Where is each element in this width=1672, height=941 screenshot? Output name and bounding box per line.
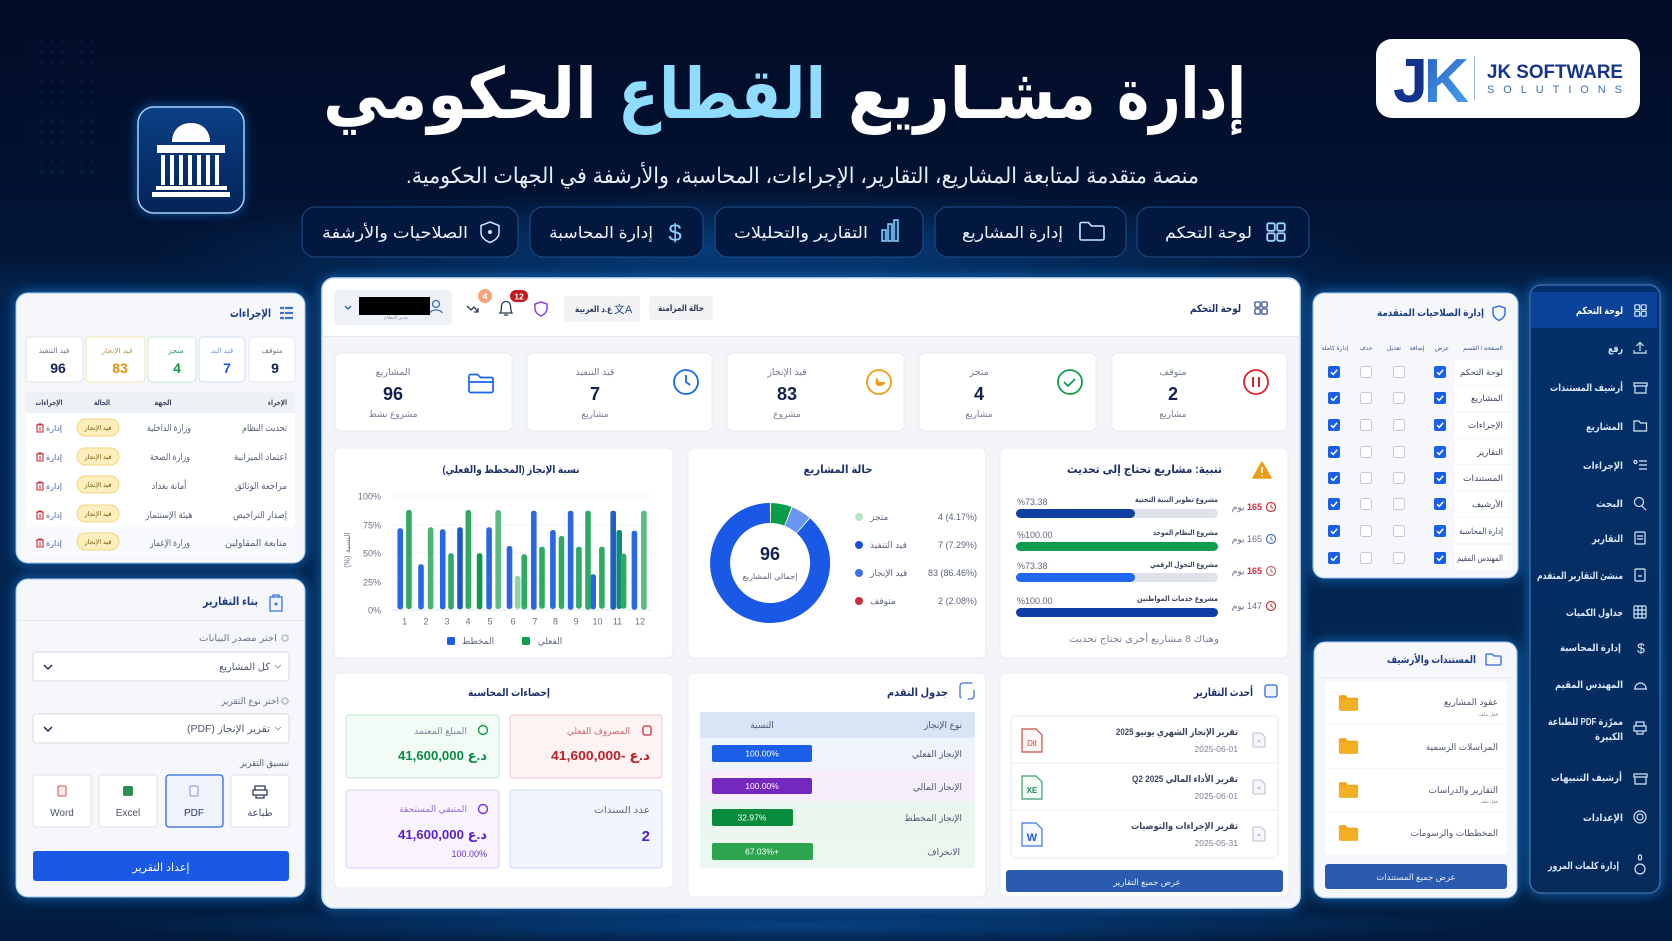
alert row 3: 165 يوم bbox=[1232, 566, 1262, 576]
panel: accounting statistics bbox=[334, 673, 673, 888]
progress table rows: 100.00% bbox=[745, 748, 779, 758]
alert row 3 bbox=[1016, 560, 1276, 582]
stat card: projects: المشاريع bbox=[376, 367, 410, 378]
pill: dashboard: لوحة التحكم bbox=[1165, 225, 1252, 243]
alert row 1 bbox=[1016, 495, 1276, 518]
donut chart bbox=[720, 513, 820, 613]
stat card: completed: منجز bbox=[968, 367, 989, 378]
progress heading bbox=[887, 683, 974, 699]
actions table: الحالة bbox=[94, 398, 110, 407]
panel: actions bbox=[16, 293, 305, 563]
card: vouchers count: 2 bbox=[642, 828, 650, 845]
chart axis labels: النسبة (%) bbox=[343, 532, 352, 568]
report row 1: Dlt bbox=[1027, 739, 1038, 748]
donut legend: متجز bbox=[869, 512, 888, 522]
chart axis labels: 7 bbox=[532, 616, 538, 626]
chart axis labels: 5 bbox=[487, 616, 493, 626]
main title: الحكومي bbox=[323, 55, 597, 135]
actions stat cards: 83 bbox=[112, 360, 128, 376]
main title bbox=[323, 55, 1246, 136]
permissions table: إضافة bbox=[1410, 345, 1425, 352]
pill: permissions bbox=[302, 207, 518, 257]
alert row 1: 165 يوم bbox=[1232, 502, 1262, 512]
report row 2: 2025-06-01 bbox=[1195, 791, 1238, 801]
view all reports button: عرض جميع التقارير bbox=[1112, 877, 1181, 887]
bell and badge: 12 bbox=[514, 292, 524, 302]
stat card: in execution: مشاريع bbox=[581, 409, 609, 419]
card: approved amount: المبلغ المعتمد bbox=[414, 726, 467, 736]
actions heading: الإجراءات bbox=[230, 308, 271, 320]
sidebar navigation: أرشيف التنبيهات bbox=[1551, 771, 1622, 784]
alert row 4: 147 يوم bbox=[1232, 601, 1262, 611]
documents list: المراسلات الرسمية bbox=[1426, 742, 1498, 752]
alert row 2: مشروع النظام الموحد bbox=[1153, 528, 1218, 537]
panel: main dashboard bbox=[322, 278, 1300, 908]
donut legend: 4 (4.17%) bbox=[938, 512, 977, 522]
view all documents button bbox=[1325, 864, 1507, 889]
actions stat cards: قيد التنفيذ bbox=[39, 346, 70, 355]
report type select: تقرير الإنجاز (PDF) bbox=[187, 724, 270, 735]
progress table rows: النسبة bbox=[750, 720, 774, 730]
header: institution icon bbox=[137, 106, 244, 213]
permissions table: الإجراءات bbox=[1468, 420, 1503, 431]
documents list: المخططات والرسومات bbox=[1410, 828, 1498, 838]
alert heading bbox=[1067, 462, 1271, 478]
actions table: متابعة المقاولين bbox=[225, 538, 287, 549]
donut legend: 7 (7.29%) bbox=[938, 540, 977, 550]
permissions table: الصفحة / القسم bbox=[1463, 345, 1503, 352]
progress table rows: الإنجاز المالي bbox=[913, 782, 962, 793]
documents heading: المستندات والأرشيف bbox=[1387, 653, 1476, 666]
alert row 4: مشروع خدمات المواطنين bbox=[1137, 594, 1218, 603]
chart axis labels bbox=[343, 492, 645, 626]
format buttons bbox=[33, 775, 289, 827]
main title: إدارة bbox=[1117, 55, 1246, 136]
documents list bbox=[1325, 682, 1507, 854]
actions table: الإجراءات bbox=[36, 398, 62, 407]
chart axis labels: 4 bbox=[465, 616, 471, 626]
report row 3: تقرير الإجراءات والتوصيات bbox=[1131, 821, 1238, 832]
stat card: completed: 4 bbox=[974, 384, 984, 404]
language box: ع.د العربية bbox=[575, 304, 613, 315]
format heading: تنسيق التقرير bbox=[239, 758, 289, 768]
chart axis labels: 10 bbox=[592, 616, 603, 626]
actions table: إدارة bbox=[46, 539, 62, 549]
chart axis labels: 11 bbox=[613, 616, 622, 626]
generate report button: إعداد التقرير bbox=[132, 862, 189, 874]
card: actual spending: المصروف الفعلي bbox=[567, 726, 630, 736]
alert row 4: %100.00 bbox=[1017, 596, 1053, 606]
actions table: قيد الإنجاز bbox=[84, 482, 111, 489]
alert row 1: %73.38 bbox=[1017, 497, 1048, 507]
pill: projects: إدارة المشاريع bbox=[962, 225, 1063, 243]
panel: progress table bbox=[688, 673, 986, 897]
actions table: أمانة بغداد bbox=[152, 479, 187, 492]
sidebar navigation: ممرّزة PDF للطباعة bbox=[1548, 717, 1623, 728]
report row 2: XE bbox=[1027, 786, 1038, 795]
chart axis labels: 2 bbox=[423, 616, 429, 626]
actions stat cards: 96 bbox=[50, 360, 66, 376]
pill: reports bbox=[715, 207, 923, 257]
donut legend: قيد التنفيذ bbox=[870, 540, 907, 550]
stat card: projects bbox=[335, 353, 512, 431]
chart axis labels: 50% bbox=[363, 548, 381, 558]
actions table bbox=[26, 392, 295, 556]
stat card: projects: مشروع نشط bbox=[368, 409, 418, 419]
progress table rows: الانحراف bbox=[927, 847, 960, 857]
panel: project status donut: 96 bbox=[760, 544, 780, 564]
reports heading: أحدث التقارير bbox=[1193, 685, 1253, 699]
panel: update alert bbox=[1000, 448, 1288, 658]
logo card: SOLUTIONS bbox=[1487, 84, 1622, 96]
permissions table: التقارير bbox=[1476, 447, 1503, 457]
permissions table: المشاريع bbox=[1471, 393, 1503, 403]
main title: مشـاريع bbox=[848, 55, 1096, 135]
actions table: هيئة الإستثمار bbox=[145, 510, 192, 521]
card: remaining due: د.ع 41,600,000 bbox=[398, 827, 487, 842]
sidebar navigation: إدارة كلمات المرور bbox=[1547, 861, 1619, 872]
actions stat cards: 9 bbox=[271, 360, 279, 376]
sidebar navigation: الإجراءات bbox=[1583, 461, 1623, 472]
sidebar navigation: رفع bbox=[1608, 344, 1623, 355]
page heading: لوحة التحكم bbox=[1190, 303, 1241, 315]
permissions table bbox=[1322, 345, 1512, 570]
card: actual spending: د.ع -41,600,000 bbox=[551, 748, 650, 763]
sidebar navigation bbox=[1530, 285, 1660, 893]
actions table: الإجراء bbox=[268, 398, 287, 407]
chart axis labels: 0% bbox=[368, 606, 381, 616]
permissions table: لوحة التحكم bbox=[1460, 367, 1503, 378]
actions stat cards: قيد الند bbox=[211, 346, 234, 355]
sidebar navigation: البحث bbox=[1596, 499, 1623, 510]
top bar bbox=[323, 279, 1299, 337]
card: remaining due bbox=[346, 790, 499, 868]
view all reports button bbox=[1006, 870, 1283, 892]
report row 1: تقرير الإنجاز الشهري يونيو 2025 bbox=[1116, 727, 1238, 738]
stat card: in progress: 83 bbox=[777, 384, 797, 404]
actions table: إدارة bbox=[46, 424, 62, 434]
donut legend: قيد الإنجاز bbox=[869, 568, 907, 579]
progress table rows: نوع الإنجاز bbox=[923, 720, 962, 731]
panel: advanced permissions bbox=[1313, 293, 1518, 578]
permissions table: الأرشيف bbox=[1472, 499, 1503, 509]
report type select: اختر نوع التقرير bbox=[220, 696, 279, 706]
actions table: قيد الإنجاز bbox=[84, 511, 111, 518]
panel: latest reports bbox=[1000, 673, 1289, 897]
bell and badge bbox=[500, 290, 528, 315]
stat card: stopped: متوقف bbox=[1159, 367, 1187, 378]
sidebar navigation: المشاريع bbox=[1586, 422, 1623, 433]
alert heading: تنبية: مشاريع تحتاج إلى تحديث bbox=[1067, 464, 1222, 477]
chart axis labels: 75% bbox=[363, 520, 381, 530]
actions stat cards: قيد الإنجاز bbox=[100, 346, 133, 355]
stat card: in progress: مشروع bbox=[773, 409, 801, 419]
documents list: ققل ملف bbox=[1480, 799, 1498, 804]
documents list: التقارير والدراسات bbox=[1428, 785, 1498, 795]
card: vouchers count: عدد السندات bbox=[594, 805, 650, 816]
report row 1: 2025-06-01 bbox=[1195, 744, 1238, 754]
alert row 2: %100.00 bbox=[1017, 530, 1053, 540]
pill: dashboard bbox=[1137, 207, 1309, 257]
actions table: قيد الإنجاز bbox=[84, 425, 111, 432]
sidebar navigation: الإعدادات bbox=[1583, 813, 1623, 824]
actions table: إصدار التراخيص bbox=[233, 510, 287, 521]
actions table: تحديث النظام bbox=[242, 423, 287, 434]
logo card: JK SOFTWARE bbox=[1487, 62, 1623, 83]
permissions table: المستندات bbox=[1463, 473, 1503, 483]
chart legend: الفعلي bbox=[538, 636, 562, 646]
alert row 3: مشروع التحول الرقمي bbox=[1150, 560, 1218, 569]
progress table rows: الإنجاز الفعلي bbox=[912, 749, 962, 760]
alert row 1: مشروع تطوير البنية التحتية bbox=[1135, 495, 1218, 504]
permissions heading: إدارة الصلاحيات المتقدمة bbox=[1377, 308, 1484, 319]
chart axis labels: 25% bbox=[363, 578, 381, 588]
chart axis labels: 3 bbox=[444, 616, 450, 626]
actions table: إدارة bbox=[46, 482, 62, 492]
actions table: اعتماد الميزانية bbox=[234, 452, 287, 463]
actions stat cards: منجز bbox=[167, 346, 184, 355]
reports list bbox=[1011, 716, 1278, 858]
alert footer: وهناك 8 مشاريع أخرى تحتاج تحديث bbox=[1069, 632, 1219, 645]
panel: project status donut bbox=[688, 448, 986, 658]
permissions table: عرض bbox=[1435, 346, 1449, 352]
progress heading: جدول التقدم bbox=[887, 687, 948, 699]
sidebar navigation: المهندس المقيم bbox=[1555, 680, 1623, 691]
user box: مدير النظام bbox=[384, 315, 408, 321]
language box: 文A bbox=[614, 302, 633, 316]
subtitle: منصة متقدمة لمتابعة المشاريع، التقارير، الإجراءات، المحاسبة، والأرشفة في الجهات الحكومية. bbox=[406, 162, 1199, 189]
actions stat cards: 7 bbox=[223, 360, 231, 376]
data source select bbox=[33, 633, 289, 681]
panel glow layer bbox=[14, 276, 1662, 910]
stat card: completed bbox=[919, 353, 1096, 431]
pill: accounting: $ bbox=[668, 220, 682, 247]
progress table rows: 32.97% bbox=[738, 812, 767, 822]
format buttons: Excel bbox=[116, 808, 140, 819]
actions stat cards: 4 bbox=[173, 360, 181, 376]
format buttons: PDF bbox=[184, 808, 204, 819]
panel: completion chart bbox=[334, 448, 673, 658]
report type select bbox=[33, 696, 289, 743]
chart axis labels: 8 bbox=[553, 616, 558, 626]
alert row 4 bbox=[1016, 594, 1276, 617]
actions stat cards bbox=[26, 337, 295, 382]
panel: completion chart: نسبة الإنجاز (المخطط والفعلي) bbox=[442, 464, 580, 476]
report row 3: W bbox=[1027, 832, 1038, 844]
chart legend: المخطط bbox=[462, 636, 494, 646]
donut legend bbox=[855, 512, 977, 606]
actions table: وزارة الإعمار bbox=[149, 538, 190, 549]
chart axis labels: 6 bbox=[510, 616, 516, 626]
sidebar navigation: الكبيرة bbox=[1595, 732, 1623, 743]
sync status box bbox=[649, 296, 713, 320]
sidebar navigation: منشئ التقارير المتقدم bbox=[1537, 571, 1623, 582]
format buttons: طباعة bbox=[247, 808, 273, 819]
report row 3 bbox=[1022, 821, 1265, 848]
card: actual spending bbox=[510, 715, 662, 778]
stat card: completed: مشاريع bbox=[965, 409, 993, 419]
report builder heading: بناء التقارير bbox=[202, 596, 258, 608]
actions table: مراجعة الوثائق bbox=[235, 481, 287, 492]
chart axis labels: 1 bbox=[402, 616, 407, 626]
documents list: ققل ملف bbox=[1478, 712, 1499, 718]
report row 3: 2025-05-31 bbox=[1195, 838, 1238, 848]
alert row 3: %73.38 bbox=[1017, 561, 1048, 571]
pill: reports: التقارير والتحليلات bbox=[734, 225, 868, 243]
sidebar navigation: جداول الكميات bbox=[1566, 608, 1623, 619]
card: vouchers count bbox=[510, 790, 662, 868]
stat card: in progress: قيد الإنجاز bbox=[766, 367, 807, 378]
pill: accounting bbox=[530, 207, 703, 257]
sidebar navigation: لوحة التحكم bbox=[1576, 306, 1623, 317]
stat card: projects: 96 bbox=[383, 384, 403, 404]
stat card: in progress bbox=[727, 353, 904, 431]
stat card: in execution: 7 bbox=[590, 384, 600, 404]
alert row 2: 165 يوم bbox=[1232, 534, 1262, 544]
sidebar navigation: أرشيف المستندات bbox=[1550, 381, 1623, 394]
logo card bbox=[1376, 39, 1640, 118]
stat card: in execution bbox=[527, 353, 712, 431]
actions table: الجهة bbox=[154, 398, 172, 407]
generate report button bbox=[33, 851, 289, 881]
documents list: عقود المشاريع bbox=[1444, 697, 1498, 707]
card: remaining due: المتبقي المستحقة bbox=[399, 804, 467, 814]
pill: projects bbox=[935, 207, 1126, 257]
stat card: stopped: 2 bbox=[1168, 384, 1178, 404]
stat card: in execution: قيد التنفيذ bbox=[576, 367, 614, 378]
navigation pills bbox=[302, 207, 1309, 257]
pill: accounting: إدارة المحاسبة bbox=[549, 225, 653, 243]
pill: permissions: الصلاحيات والأرشفة bbox=[322, 222, 468, 243]
shield icon bbox=[535, 302, 547, 316]
sidebar navigation: التقارير bbox=[1591, 534, 1623, 545]
card: approved amount bbox=[346, 715, 499, 778]
card: remaining due: 100.00% bbox=[451, 849, 487, 859]
sidebar icons bbox=[1634, 305, 1647, 874]
trend icon and badge bbox=[467, 289, 492, 312]
permissions table: حذف bbox=[1359, 345, 1373, 352]
actions stat cards: متوقف bbox=[261, 346, 283, 355]
actions table: وزارة الداخلية bbox=[147, 423, 191, 434]
sidebar navigation: $ bbox=[1637, 640, 1645, 656]
actions table: إدارة bbox=[46, 511, 62, 521]
donut legend: 2 (2.08%) bbox=[938, 596, 977, 606]
progress table rows bbox=[700, 712, 975, 868]
chart legend bbox=[447, 636, 562, 646]
panel: accounting statistics: إحصاءات المحاسبة bbox=[468, 687, 550, 699]
donut legend: متوقف bbox=[870, 596, 896, 606]
permissions table: تعديل bbox=[1387, 345, 1401, 352]
logo card: JK bbox=[1393, 47, 1469, 116]
panel: report builder bbox=[16, 579, 305, 897]
chart axis labels: 100% bbox=[358, 492, 381, 502]
chart axis labels: 9 bbox=[573, 616, 579, 626]
progress table rows: +67.03% bbox=[745, 846, 779, 856]
actions table: وزارة الصحة bbox=[150, 452, 190, 463]
progress table rows: 100.00% bbox=[745, 781, 779, 791]
report builder heading bbox=[202, 595, 282, 611]
donut legend: 83 (86.46%) bbox=[928, 568, 977, 578]
chart axis labels: 12 bbox=[635, 616, 645, 626]
language box bbox=[564, 296, 640, 322]
data source select: اختر مصدر البيانات bbox=[199, 633, 277, 643]
actions table: قيد الإنجاز bbox=[84, 454, 111, 461]
card: approved amount: د.ع 41,600,000 bbox=[398, 748, 487, 763]
actions table: قيد الإنجاز bbox=[84, 539, 111, 546]
panel: documents and archive bbox=[1314, 642, 1517, 898]
user box bbox=[334, 290, 452, 325]
report row 1 bbox=[1022, 727, 1265, 754]
actions table: إدارة bbox=[46, 453, 62, 463]
data source select: كل المشاريع bbox=[219, 662, 270, 673]
sidebar navigation: إدارة المحاسبة bbox=[1560, 643, 1621, 654]
alert row 2 bbox=[1016, 528, 1276, 551]
progress table rows: الإنجاز المخطط bbox=[904, 813, 962, 824]
chart bars bbox=[397, 510, 647, 610]
stat card: stopped bbox=[1112, 353, 1287, 431]
stat card: stopped: مشاريع bbox=[1159, 409, 1187, 419]
panel: project status donut: حالة المشاريع bbox=[804, 464, 872, 476]
view all documents button: عرض جميع المستندات bbox=[1376, 872, 1456, 882]
main title: القطاع bbox=[618, 55, 826, 135]
permissions table: إدارة المحاسبة bbox=[1459, 526, 1503, 537]
report row 2 bbox=[1022, 773, 1265, 801]
trend icon and badge: 4 bbox=[482, 292, 488, 302]
permissions table: المهندس المقيم bbox=[1457, 553, 1503, 564]
permissions table: إدارة كاملة bbox=[1322, 345, 1349, 352]
sync status box: حالة المرامنة bbox=[658, 303, 704, 314]
report row 2: تقرير الأداء المالي Q2 2025 bbox=[1132, 773, 1238, 785]
panel: project status donut: إجمالي المشاريع bbox=[743, 572, 797, 582]
format buttons: Word bbox=[50, 808, 74, 819]
